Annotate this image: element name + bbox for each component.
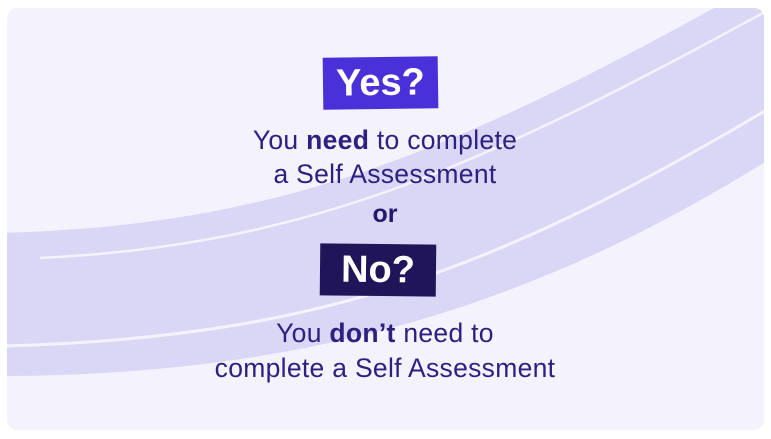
text: or: or [372, 200, 398, 228]
text: no explanation: complete a Self Assessment [215, 353, 555, 383]
badge: Yes?: Yes? [336, 61, 425, 105]
badge: Yes? [323, 56, 438, 110]
text: yes explanation [253, 125, 517, 189]
badge: No? [320, 243, 436, 297]
text: yes explanation: You need to complete [253, 125, 517, 155]
badge: No?: No? [341, 249, 415, 291]
text: no explanation: You don’t need to [276, 318, 494, 348]
text: no explanation [215, 318, 555, 383]
text: yes explanation: a Self Assessment [273, 159, 497, 189]
